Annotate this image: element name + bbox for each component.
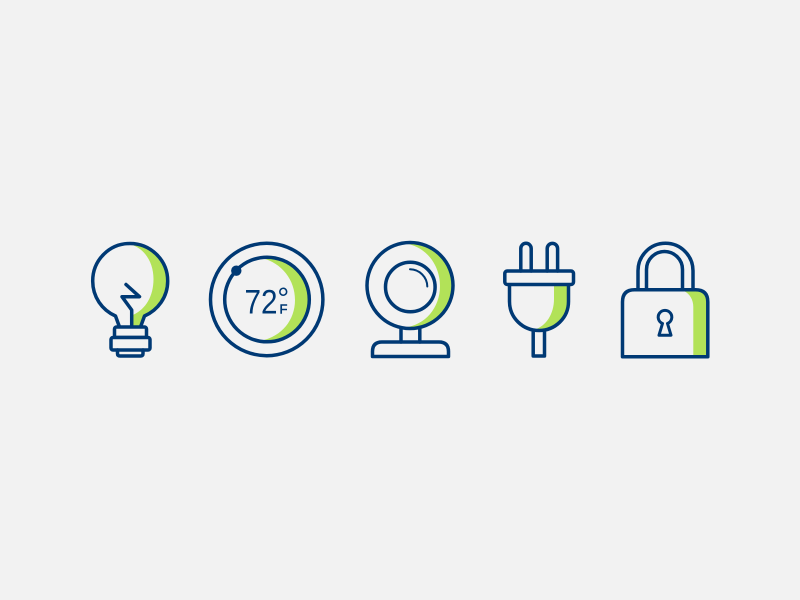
icon: thermostat: [211, 243, 323, 356]
icon: padlock: [622, 243, 708, 357]
keyhole: [658, 310, 672, 335]
fahrenheit unit: F: [280, 302, 288, 316]
temperature reading: 72: [244, 284, 278, 322]
icon: webcam: [367, 242, 453, 356]
dial marker: [231, 266, 242, 276]
degree symbol: °: [277, 283, 289, 316]
icon: light bulb: [93, 244, 168, 356]
icon: plug: [505, 243, 574, 356]
